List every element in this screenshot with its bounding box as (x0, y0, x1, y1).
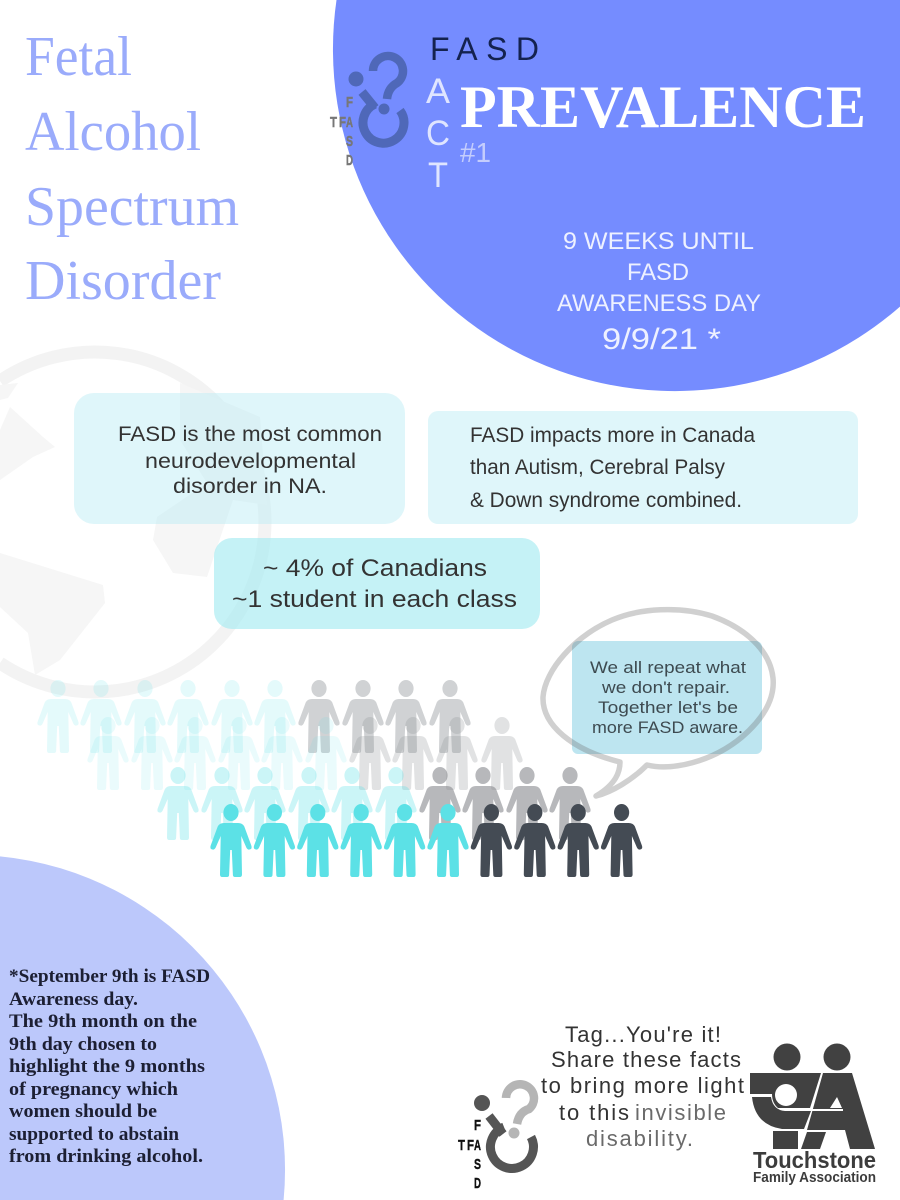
icon: speech bubble outline (543, 610, 773, 796)
heading: FACT vertical: A (426, 72, 451, 111)
text: footnote: of pregnancy which (9, 1079, 178, 1100)
callout: quote box: We all repeat what (590, 658, 746, 677)
panel: most common disorder: neurodevelopmental (145, 450, 356, 473)
icon: TFASD logo bottom (458, 1084, 534, 1192)
panel: impact comparison: FASD impacts more in Canada (470, 424, 755, 447)
callout: quote box (572, 641, 762, 754)
icon: TFASD logo top: S (346, 133, 353, 150)
panel: impact comparison: than Autism, Cerebral Palsy (470, 456, 725, 479)
text: footnote: *September 9th is FASD (9, 966, 210, 987)
icon: TFASD logo top (330, 56, 404, 169)
title: Alcohol (25, 101, 201, 163)
panel: footnote circle (0, 856, 285, 1200)
panel: impact comparison (428, 411, 858, 524)
countdown text: 9 WEEKS UNTIL (563, 228, 754, 255)
title (25, 26, 239, 312)
countdown text: FASD (627, 259, 689, 286)
panel: most common disorder: FASD is the most common (118, 423, 382, 446)
text: footnote: highlight the 9 months (9, 1056, 205, 1077)
panel: prevalence statistic: ~1 student in each class (232, 586, 517, 613)
row 2 teal people (87, 717, 347, 790)
panel: header circle (333, 0, 900, 391)
callout: quote box: more FASD aware. (592, 718, 743, 737)
icon: TFASD logo bottom: F (474, 1117, 481, 1134)
chart: people pictogram (37, 680, 642, 877)
icon: TFASD logo bottom: T (458, 1137, 465, 1154)
row 4 dark people (471, 804, 642, 877)
text: footnote: 9th day chosen to (9, 1034, 157, 1055)
panel: most common disorder (74, 393, 405, 524)
icon: TFASD logo top: F (339, 114, 346, 131)
icon: Touchstone Family Association logo: Touchstone (753, 1147, 876, 1173)
countdown text (557, 228, 761, 356)
icon: TFASD logo top: D (346, 152, 353, 169)
text: call to share: to bring more light (541, 1073, 744, 1098)
heading: PREVALENCE: PREVALENCE (460, 74, 866, 140)
row 1 teal people (37, 680, 296, 753)
text: call to share: invisible (635, 1100, 726, 1125)
callout: quote box: Together let's be (598, 698, 738, 717)
icon: TFASD logo bottom: A (474, 1137, 481, 1154)
text: footnote: from drinking alcohol. (9, 1146, 203, 1167)
heading: FACT vertical (426, 72, 451, 195)
text: footnote: supported to abstain (9, 1124, 179, 1145)
title: Disorder (25, 250, 221, 312)
icon: TFASD logo top: A (346, 114, 353, 131)
text: call to share (541, 1022, 744, 1151)
row 2 gray people (349, 717, 523, 790)
text: call to share: disability. (586, 1126, 693, 1151)
row 4 teal people (210, 804, 469, 877)
icon: TFASD logo bottom: F (467, 1137, 474, 1154)
row 3 gray people (419, 767, 591, 840)
countdown text: AWARENESS DAY (557, 290, 761, 317)
row 3 teal people (157, 767, 417, 840)
text: footnote (9, 966, 210, 1167)
text: footnote: women should be (9, 1101, 157, 1122)
icon: Touchstone Family Association logo (750, 1044, 876, 1186)
panel: impact comparison: & Down syndrome combined. (470, 489, 742, 512)
text: footnote: Awareness day. (9, 989, 138, 1010)
title: Fetal (25, 26, 132, 88)
row 1 gray people (298, 680, 471, 753)
title: Spectrum (25, 176, 239, 238)
text: call to share: Share these facts (551, 1047, 741, 1072)
heading: FACT vertical: C (426, 114, 450, 153)
fact number: #1 (460, 137, 491, 168)
text: footnote: The 9th month on the (9, 1011, 197, 1032)
icon: TFASD logo top: F (346, 94, 353, 111)
icon: TFASD logo bottom: S (474, 1156, 481, 1173)
icon: TFASD logo top: T (330, 114, 337, 131)
background globe (0, 352, 267, 692)
icon: Touchstone Family Association logo: Family Association (753, 1170, 876, 1186)
callout: quote box: we don't repair. (601, 678, 730, 697)
panel: prevalence statistic: ~ 4% of Canadians (263, 555, 487, 582)
panel: prevalence statistic (214, 538, 540, 629)
icon: TFASD logo bottom: D (474, 1175, 481, 1192)
text: call to share: Tag...You're it! (565, 1022, 721, 1047)
heading: FASD: FASD (430, 31, 539, 67)
heading: FACT vertical: T (428, 156, 448, 195)
countdown text: 9/9/21 * (602, 323, 721, 356)
text: call to share: to this (559, 1100, 629, 1125)
panel: most common disorder: disorder in NA. (173, 475, 327, 498)
